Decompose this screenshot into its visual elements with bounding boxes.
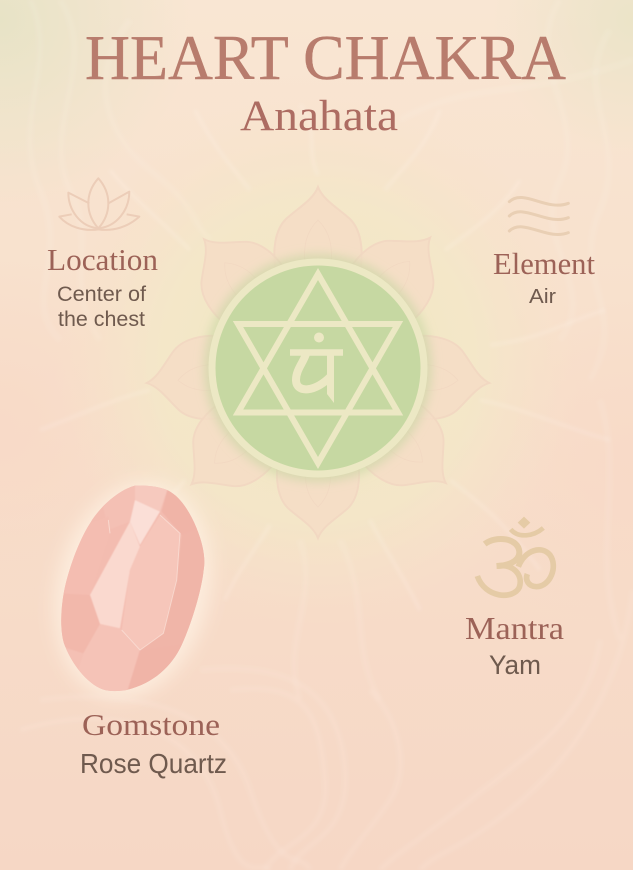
icon: om symbol: [477, 517, 553, 595]
element heading: Element: [493, 246, 595, 281]
icon: air waves: [509, 197, 568, 235]
location heading: Location: [47, 242, 158, 277]
lotus petals: [143, 187, 493, 538]
element text: Air: [529, 286, 556, 308]
green disc: [212, 262, 424, 474]
chakra mandala: [143, 187, 493, 538]
panel: element: [493, 197, 595, 308]
mantra text: Yam: [489, 650, 541, 680]
gemstone heading: Gomstone: [82, 707, 220, 742]
title: HEART CHAKRA: [85, 23, 566, 93]
gemstone text: Rose Quartz: [80, 748, 227, 779]
panel: location: [47, 178, 158, 331]
subtitle: Anahata: [240, 93, 398, 140]
mantra heading: Mantra: [465, 610, 564, 646]
green glow: [204, 254, 432, 482]
gem glow: [33, 465, 233, 715]
location text: Center of: [57, 283, 146, 306]
panel: gemstone: [53, 480, 226, 778]
icon: rose quartz: [61, 486, 204, 692]
panel: mantra: [465, 517, 564, 680]
icon: yam seed syllable: [290, 332, 343, 403]
star of two triangles: [238, 274, 398, 463]
panel: location: the chest: [58, 308, 145, 331]
icon: lotus: [59, 178, 139, 230]
